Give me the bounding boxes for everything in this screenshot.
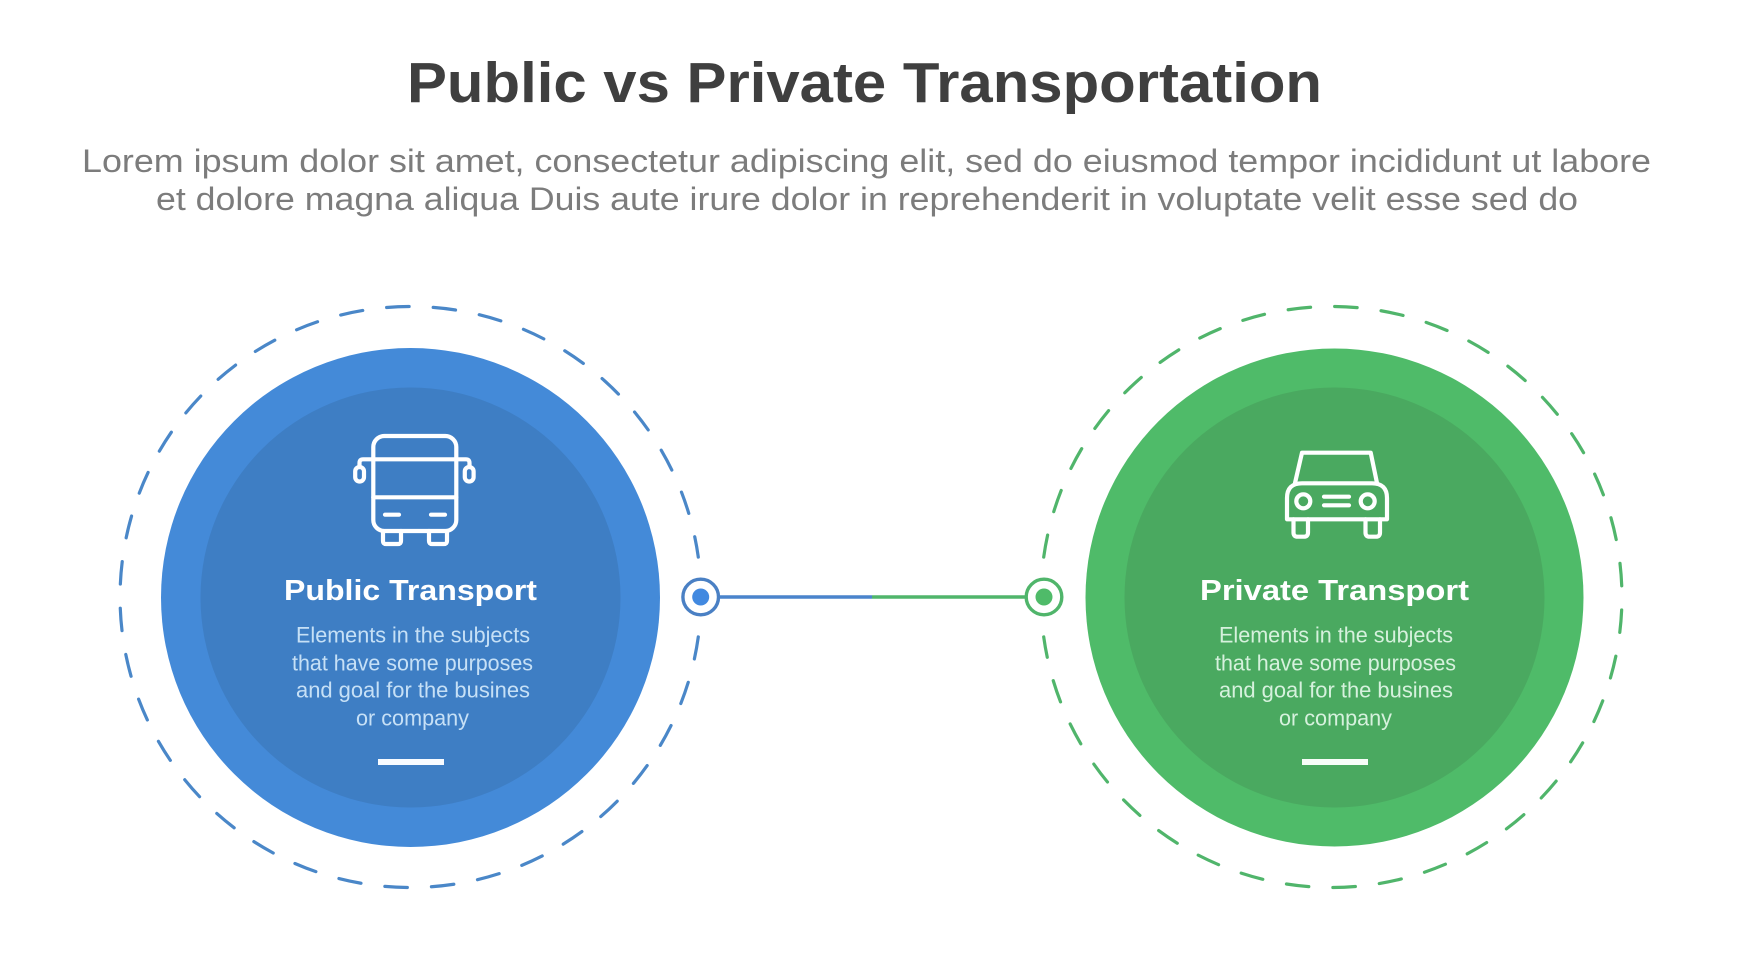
subtitle text block: et dolore magna aliqua Duis aute irure dolor in reprehenderit in voluptate velit esse sed do xyxy=(156,181,1578,217)
outer circle: public xyxy=(161,348,660,847)
description: private transport: Elements in the subjects xyxy=(1219,622,1453,648)
description: public transport: and goal for the busines xyxy=(296,678,530,702)
subtitle text block xyxy=(82,143,1651,217)
title: Public vs Private Transportation xyxy=(407,51,1322,115)
description: public transport: Elements in the subjects xyxy=(296,622,530,648)
connector line xyxy=(700,595,1044,599)
dashed ring: public xyxy=(120,306,698,888)
description: public transport xyxy=(292,622,533,730)
subtitle text block: Lorem ipsum dolor sit amet, consectetur adipiscing elit, sed do eiusmod tempor incididunt ut labore xyxy=(82,143,1651,179)
node: private xyxy=(1026,579,1062,615)
dashed ring: private xyxy=(1044,306,1622,888)
accent bar: public xyxy=(378,759,444,765)
description: private transport: or company xyxy=(1279,706,1392,730)
description: private transport: that have some purposes xyxy=(1215,650,1456,676)
description: private transport xyxy=(1215,622,1456,730)
icon: car xyxy=(1287,453,1387,537)
inner circle: private xyxy=(1124,388,1544,808)
accent bar: private xyxy=(1302,759,1368,765)
node: public xyxy=(683,579,718,615)
description: private transport: and goal for the busines xyxy=(1219,678,1453,702)
description: public transport: or company xyxy=(356,706,469,730)
inner circle: public xyxy=(200,388,620,808)
panel: public transport xyxy=(120,306,698,888)
heading: public transport: Public Transport xyxy=(284,575,537,607)
description: public transport: that have some purposes xyxy=(292,650,533,676)
icon: bus xyxy=(355,436,474,544)
heading: private transport: Private Transport xyxy=(1200,575,1469,607)
panel: private transport xyxy=(1044,306,1622,888)
outer circle: private xyxy=(1086,348,1584,846)
